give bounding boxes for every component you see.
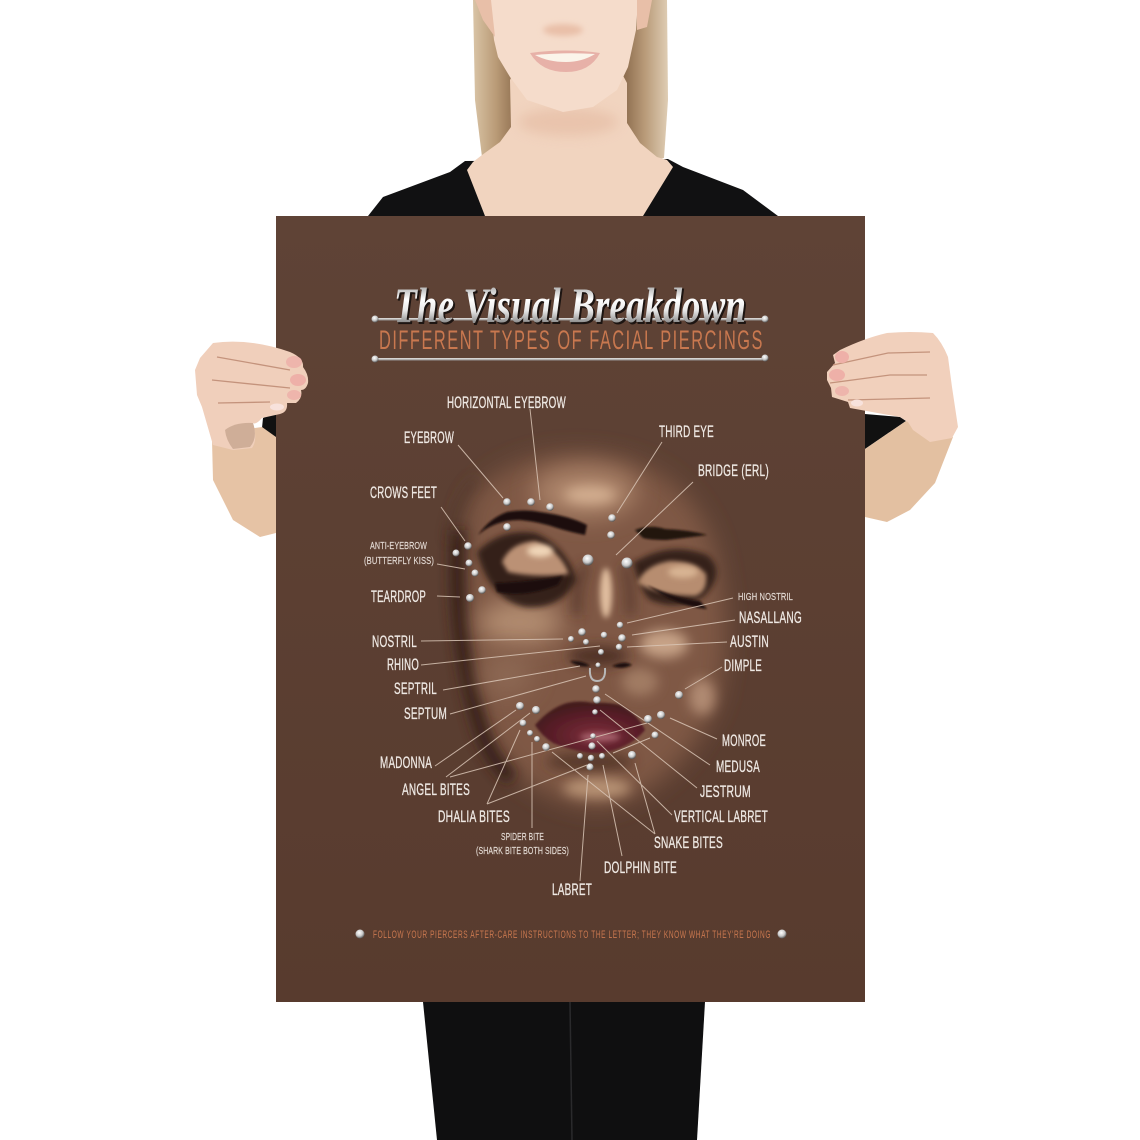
- ears: [475, 0, 652, 37]
- smile: [530, 50, 600, 72]
- piercing labels: SNAKE BITES: [654, 834, 723, 852]
- pants: [423, 1002, 705, 1140]
- chin glow: [563, 778, 631, 798]
- neck and chest skin: [467, 70, 673, 216]
- face base: [465, 455, 725, 808]
- piercing labels: DOLPHIN BITE: [604, 859, 677, 877]
- nostrils: [570, 661, 632, 668]
- right lash: [647, 585, 707, 609]
- piercing labels: MEDUSA: [716, 758, 760, 776]
- title block: [372, 277, 768, 362]
- piercing labels: TEARDROP: [371, 588, 426, 606]
- piercing labels: NOSTRIL: [372, 633, 417, 651]
- model: woman holding the poster: [368, 0, 778, 216]
- piercing labels: THIRD EYE: [659, 423, 714, 441]
- piercing labels: DHALIA BITES: [438, 808, 510, 826]
- nose: [543, 24, 583, 36]
- piercing labels: EYEBROW: [404, 429, 454, 447]
- subtitle: DIFFERENT TYPES OF FACIAL PIERCINGS: [379, 325, 764, 355]
- piercing labels: JESTRUM: [700, 783, 751, 801]
- left hand over the poster: [195, 342, 308, 450]
- left lash: [495, 576, 563, 594]
- piercing labels: ANGEL BITES: [402, 781, 470, 799]
- cheeks: [478, 600, 562, 644]
- left forearm: [212, 412, 276, 537]
- piercing labels: SPIDER BITE: [501, 831, 544, 843]
- piercing labels: CROWS FEET: [370, 484, 437, 502]
- piercing labels: HORIZONTAL EYEBROW: [447, 394, 566, 412]
- piercing studs: [452, 498, 683, 771]
- piercing labels: ANTI-EYEBROW: [370, 540, 427, 552]
- hair: [473, 0, 668, 165]
- piercing labels: BRIDGE (ERL): [698, 462, 769, 480]
- footer note: [356, 929, 786, 941]
- right eyebrow: [635, 527, 707, 540]
- piercing labels: MONROE: [722, 732, 766, 750]
- right forearm: [865, 414, 953, 522]
- right eye socket: [633, 549, 716, 605]
- piercing labels: (SHARK BITE BOTH SIDES): [476, 845, 569, 857]
- septum ring: [590, 668, 605, 681]
- shirt: [368, 159, 778, 216]
- lips: [535, 702, 645, 753]
- piercing labels: SEPTRIL: [394, 680, 437, 698]
- painted face illustration: [450, 455, 725, 808]
- piercing labels: DIMPLE: [724, 657, 762, 675]
- piercing labels: RHINO: [387, 656, 419, 674]
- piercing labels: MADONNA: [380, 754, 432, 772]
- piercing labels: AUSTIN: [730, 633, 769, 651]
- poster panel: [276, 216, 865, 1002]
- piercing labels: NASALLANG: [739, 609, 802, 627]
- face: [490, 0, 638, 112]
- left side shadow: [457, 530, 512, 778]
- piercing labels: [364, 394, 802, 899]
- forehead glow: [533, 466, 637, 518]
- piercing labels: SEPTUM: [404, 705, 447, 723]
- leader lines: [421, 409, 735, 881]
- title script: The Visual Breakdown: [396, 278, 748, 334]
- title block: The Visual Breakdown: [394, 277, 746, 333]
- left eyebrow: [478, 510, 587, 535]
- left eye socket: [477, 532, 577, 607]
- nose shadow and highlight: [577, 565, 586, 615]
- footer note: FOLLOW YOUR PIERCERS AFTER-CARE INSTRUCTIONS TO THE LETTER; THEY KNOW WHAT THEY'RE DOING: [373, 929, 771, 941]
- piercing labels: VERTICAL LABRET: [674, 808, 768, 826]
- shadow below lips: [546, 752, 634, 772]
- piercing labels: HIGH NOSTRIL: [738, 591, 793, 603]
- title bars: [372, 316, 768, 362]
- right hand over the poster: [827, 332, 958, 442]
- piercing labels: LABRET: [552, 881, 592, 899]
- piercing labels: (BUTTERFLY KISS): [364, 555, 434, 567]
